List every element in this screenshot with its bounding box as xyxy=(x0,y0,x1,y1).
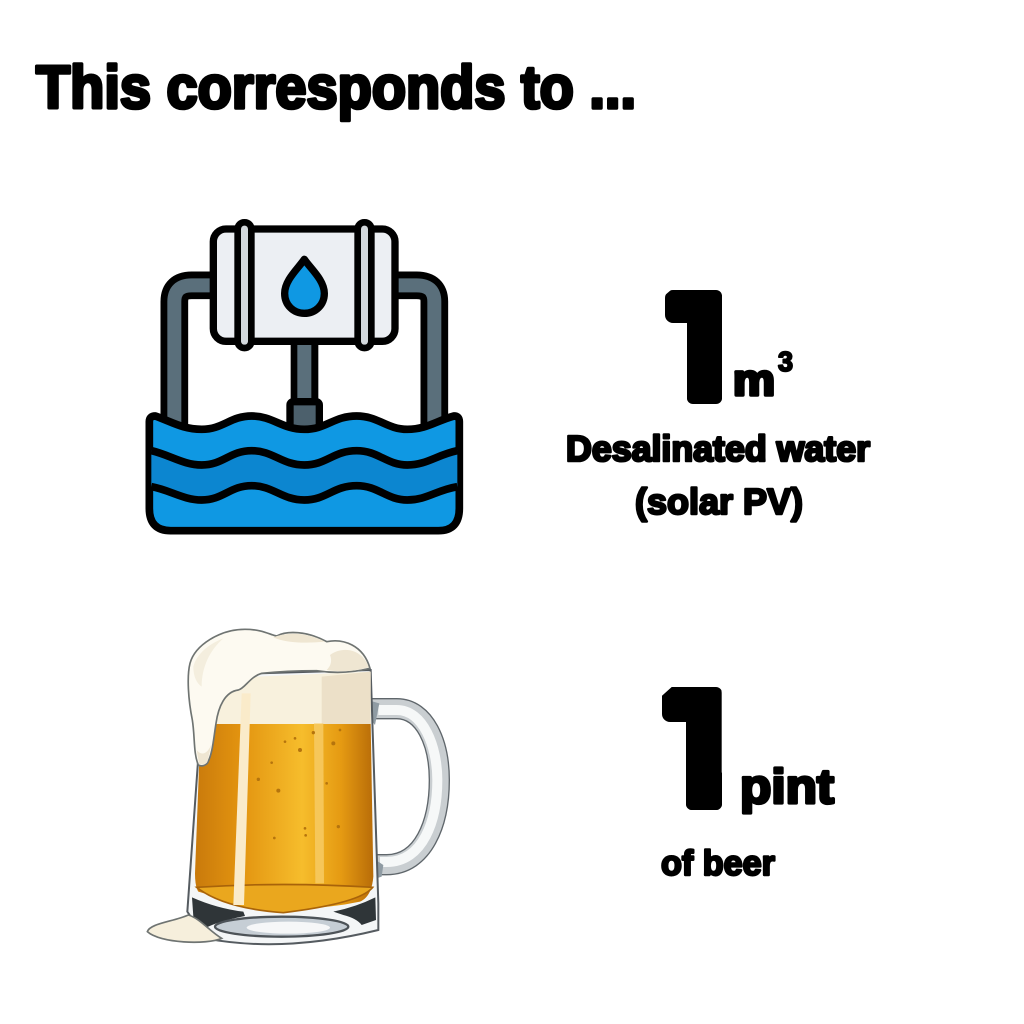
handle joints xyxy=(367,700,383,880)
label: desalinated water: Desalinated water xyxy=(566,428,870,469)
tank bands xyxy=(238,222,371,348)
beer liquid xyxy=(195,723,373,908)
glass body xyxy=(187,670,378,944)
unit m3 xyxy=(733,346,793,405)
title: This corresponds to ... xyxy=(36,54,636,121)
water drop xyxy=(285,259,324,313)
lower beer band xyxy=(197,884,373,913)
foam top xyxy=(188,629,370,766)
bubbles xyxy=(257,729,341,839)
unit m3: 3 xyxy=(778,346,793,377)
foam in glass xyxy=(213,672,371,724)
foam shade xyxy=(322,672,371,724)
foam spill xyxy=(147,915,222,942)
wave lines xyxy=(151,451,457,500)
label: of beer: of beer xyxy=(661,844,775,883)
glass highlights xyxy=(233,693,324,905)
foam shading xyxy=(193,634,369,764)
left pipe xyxy=(174,285,217,427)
big number 1 (water): 1 xyxy=(665,261,731,437)
icon: beer mug xyxy=(147,629,439,944)
label: solar PV: (solar PV) xyxy=(635,481,803,522)
glass base shading xyxy=(192,897,376,937)
right pipe xyxy=(392,285,434,427)
water body xyxy=(149,416,459,531)
icon: desalination water pump xyxy=(149,222,459,531)
unit pint: pint xyxy=(740,761,834,814)
centre post xyxy=(290,340,319,430)
unit m3: m xyxy=(733,356,775,405)
handle xyxy=(372,709,439,865)
big number 1 (beer): 1 xyxy=(662,657,730,847)
tank xyxy=(213,229,395,341)
darker water band xyxy=(151,451,457,500)
